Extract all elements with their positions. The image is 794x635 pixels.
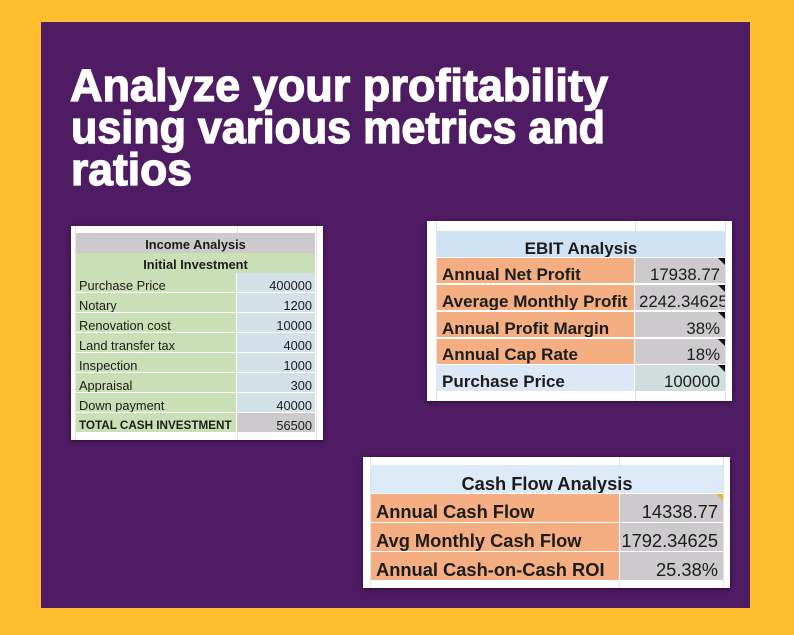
row: annual cash-on-cash ROI: Annual Cash-on-Cash ROI [376, 559, 605, 580]
row: inspection [76, 353, 315, 372]
row: purchase price: Purchase Price [442, 372, 565, 391]
row: annual net profit: Annual Net Profit [442, 264, 581, 283]
row: purchase price: 100000 [664, 372, 720, 391]
row: total cash investment: TOTAL CASH INVESTMENT [79, 418, 232, 432]
EBIT table header: EBIT Analysis [525, 238, 637, 257]
panel: EBIT analysis table [427, 221, 732, 401]
row: appraisal [76, 373, 315, 392]
row: avg monthly cash flow [371, 523, 723, 551]
row: annual cap rate [437, 339, 725, 364]
row: annual cash flow [371, 494, 723, 522]
row: notary [76, 293, 315, 312]
title: Analyze your profitability [70, 60, 608, 111]
row: average monthly profit: Average Monthly Profit [442, 292, 627, 310]
row: renovation cost [76, 313, 315, 332]
row: annual profit margin: Annual Profit Margin [442, 318, 609, 337]
row: annual cash flow: 14338.77 [642, 501, 718, 522]
title [70, 60, 609, 195]
title: ratios [71, 144, 192, 195]
row: annual profit margin: 38% [686, 318, 720, 337]
income table header: Income Analysis [145, 237, 246, 252]
cash flow table header [371, 465, 723, 493]
panel: income analysis table [71, 226, 323, 440]
row: avg monthly cash flow: Avg Monthly Cash Flow [376, 530, 582, 551]
initial investment subheader: Initial Investment [143, 257, 248, 272]
row: annual cap rate: 18% [686, 345, 720, 364]
title: using various metrics and [71, 102, 605, 153]
panel: cash flow analysis table [363, 457, 730, 588]
row: land transfer tax [76, 333, 315, 352]
row: annual cash-on-cash ROI [371, 552, 723, 580]
row: annual cash flow: Annual Cash Flow [376, 501, 534, 522]
row: annual net profit [437, 258, 725, 283]
row: annual profit margin [437, 312, 725, 337]
row: annual cash-on-cash ROI: 25.38% [656, 559, 718, 580]
row: avg monthly cash flow: 1792.34625 [621, 530, 718, 551]
note marker [716, 494, 723, 501]
row: annual cap rate: Annual Cap Rate [442, 345, 578, 364]
row: down payment [76, 393, 315, 412]
row: average monthly profit [437, 285, 725, 310]
EBIT table header [437, 231, 725, 257]
income table header [76, 233, 315, 252]
row: purchase price [437, 365, 725, 391]
row: annual net profit: 17938.77 [650, 264, 720, 283]
row: total cash investment [76, 413, 315, 432]
row: purchase price [76, 273, 315, 292]
initial investment subheader [76, 253, 315, 272]
